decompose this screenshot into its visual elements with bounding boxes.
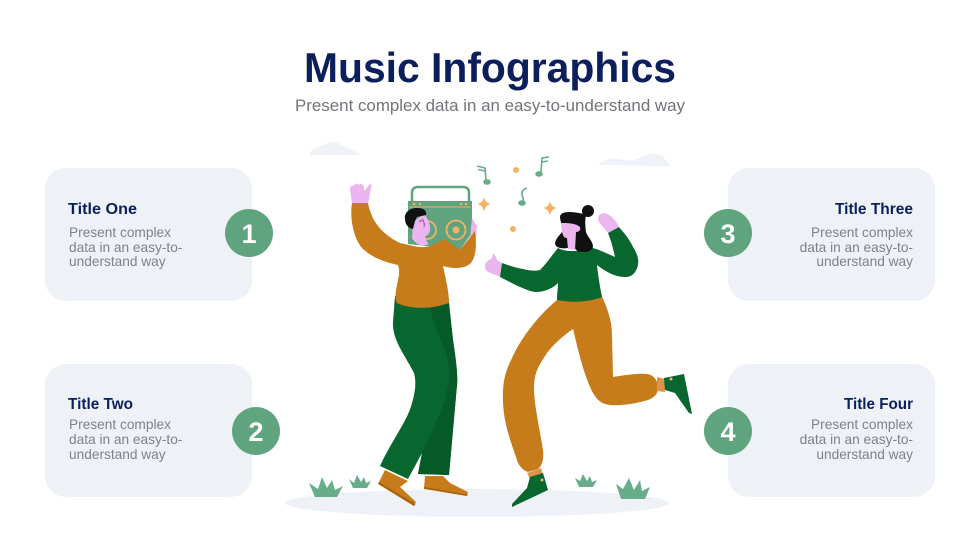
text: title four body: Present complex: [811, 417, 913, 432]
text: title three body: understand way: [816, 254, 913, 269]
heading: title one: Title One: [68, 201, 137, 218]
panel: title one: [45, 168, 273, 301]
heading: title three: Title Three: [835, 201, 913, 218]
text: title three body: data in an easy-to-: [800, 240, 913, 255]
number badge 4: 4: [720, 417, 736, 447]
man sweater: [351, 203, 476, 308]
grass: [309, 474, 650, 499]
text: title one body: Present complex: [69, 225, 171, 240]
music notes: [477, 157, 549, 205]
central illustration: dancing couple: [285, 142, 692, 517]
panel: title three: [704, 168, 935, 301]
woman face: [561, 223, 580, 250]
text: title three body: Present complex: [811, 225, 913, 240]
boombox: [408, 187, 472, 250]
heading: title two: Title Two: [68, 396, 133, 413]
woman shoes: [664, 374, 692, 414]
number badge 4: [704, 407, 752, 455]
text: title two body: [69, 417, 182, 462]
clouds: [308, 142, 671, 166]
woman hands: [485, 253, 502, 277]
number badge 3: 3: [720, 219, 736, 249]
man head: [405, 208, 430, 246]
man shoes: [378, 470, 416, 506]
text: title two body: data in an easy-to-: [69, 432, 182, 447]
panel: title four: [704, 364, 935, 497]
text: title one body: [69, 225, 182, 269]
subtitle: Present complex data in an easy-to-understand way: [295, 96, 685, 115]
number badge 3: [704, 209, 752, 257]
number badge 2: 2: [248, 417, 264, 447]
text: title four body: data in an easy-to-: [800, 432, 913, 447]
ground: [285, 489, 669, 517]
text: title one body: data in an easy-to-: [69, 240, 182, 255]
woman sweater: [500, 227, 638, 302]
panel: title two: [45, 364, 280, 497]
text: title three body: [800, 225, 913, 269]
sparkles and dots: [477, 167, 557, 232]
man hands: [350, 184, 372, 204]
woman trousers: [503, 292, 658, 472]
text: title two body: Present complex: [69, 417, 171, 432]
text: title four body: [800, 417, 913, 462]
woman: [485, 205, 692, 507]
number badge 1: [225, 209, 273, 257]
text: title four body: understand way: [816, 447, 913, 462]
number badge 2: [232, 407, 280, 455]
heading: title four: Title Four: [844, 396, 913, 413]
woman hair: [555, 205, 594, 252]
title: Music Infographics: [304, 44, 676, 91]
number badge 1: 1: [241, 219, 257, 249]
man: [350, 184, 477, 506]
text: title two body: understand way: [69, 447, 166, 462]
text: title one body: understand way: [69, 254, 166, 269]
man trousers: [380, 294, 457, 479]
